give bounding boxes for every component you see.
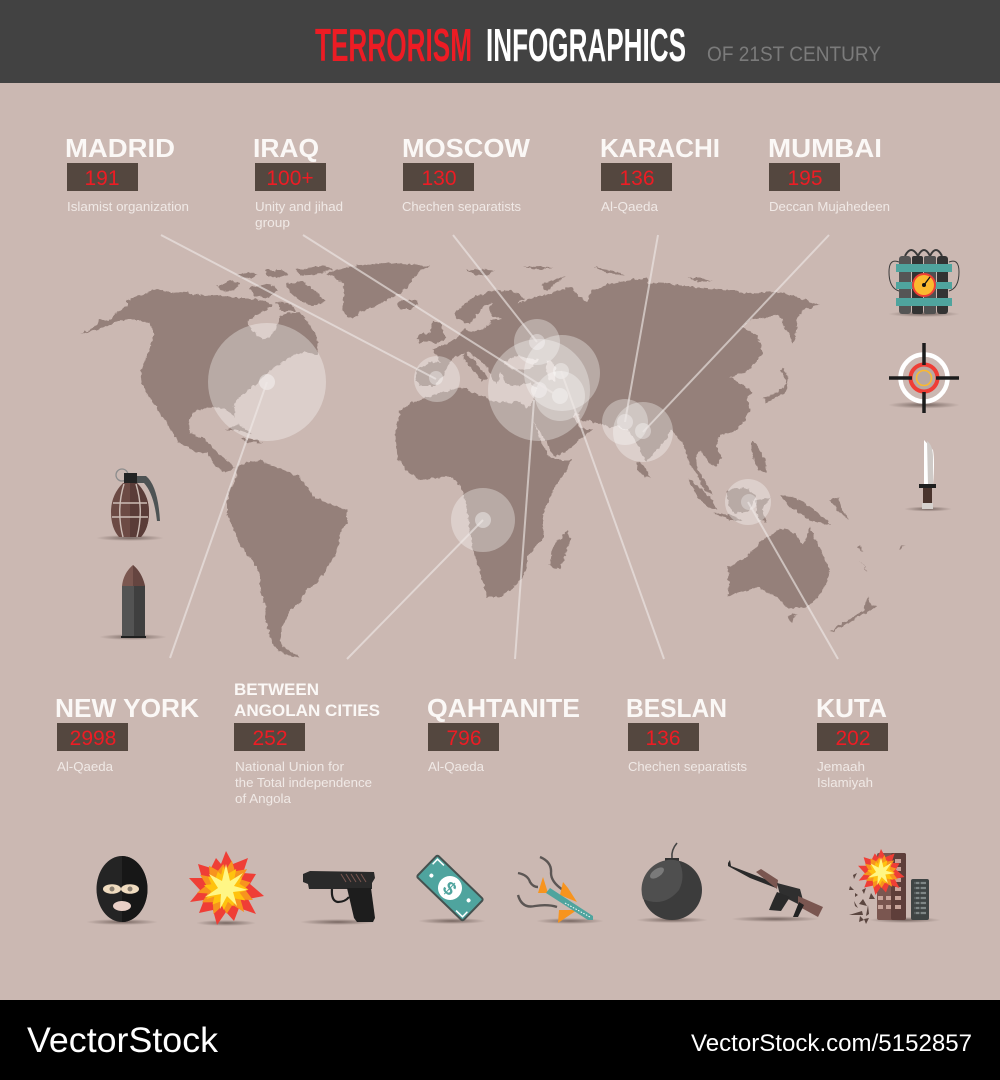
circle: new york [208,323,326,441]
iceland [397,300,419,309]
icon: assault rifle [728,860,823,922]
world map [80,263,905,657]
label: kuta: Jemaah [817,759,865,774]
label: iraq: 100+ [266,167,314,190]
circle: qahtanite [535,371,585,421]
arctic islands [217,265,333,311]
icon: balaclava mask [86,856,158,925]
eurasia [416,277,820,495]
label: qahtanite: 796 [446,727,482,750]
label: new york: Al-Qaeda [57,759,114,774]
header bar with title: TERRORISM [315,19,472,71]
icon: crosshair target [888,343,960,413]
greenland [327,263,430,319]
circle: moscow [514,319,560,365]
icon: pistol [300,871,376,925]
label: between angolan cities: 252 [252,727,288,750]
label: new york: NEW YORK [55,693,199,723]
label: iraq: IRAQ [253,133,319,163]
label: qahtanite: Al-Qaeda [428,759,485,774]
label: karachi: Al-Qaeda [601,199,659,214]
label: madrid: 191 [84,167,120,190]
circle: madrid [414,356,460,402]
icon: knife [904,440,952,512]
circle: kuta [725,479,771,525]
icon: banknote: $ [438,878,460,901]
label: qahtanite [427,693,580,774]
label: iraq: Unity and jihad [255,199,343,214]
label: iraq: group [255,215,290,230]
footer bar with watermark [0,1000,1000,1080]
central america islands [225,424,262,443]
label: mumbai: MUMBAI [768,133,882,163]
label: madrid [65,133,189,214]
label: mumbai: 195 [787,167,823,190]
south america [227,460,347,657]
label: between angolan cities [234,680,380,806]
label: moscow: Chechen separatists [402,199,521,214]
label: qahtanite: QAHTANITE [427,693,580,723]
icon: round bomb [636,843,708,923]
label: between angolan cities: ANGOLAN CITIES [234,701,380,720]
icon: explosion [189,851,264,926]
label: moscow: 130 [421,167,457,190]
label: beslan [626,693,747,774]
circle: iraq [488,339,590,441]
label: karachi [600,133,720,214]
icon: bullet [99,565,167,640]
africa [395,387,572,597]
label: between angolan cities: the Total independence [235,775,372,790]
madagascar [550,530,570,570]
header bar with title: OF 21ST CENTURY [707,43,881,66]
label: beslan: BESLAN [626,693,727,723]
label: beslan: Chechen separatists [628,759,747,774]
north america [80,289,318,472]
new zealand [830,597,877,632]
asia and pacific islands [637,368,905,572]
label: kuta: 202 [835,727,871,750]
footer bar with watermark: VectorStock.com/5152857 [691,1030,972,1057]
label: between angolan cities: of Angola [235,791,292,806]
label: kuta: Islamiyah [817,775,873,790]
label: moscow: MOSCOW [402,133,530,163]
label: iraq [253,133,343,230]
icon: dynamite [888,250,960,317]
label: between angolan cities: BETWEEN [234,680,319,699]
icon: crashing plane [518,857,604,924]
icon: exploding building [849,849,941,924]
circle: beslan [524,335,600,411]
footer bar with watermark: VectorStock [27,1021,219,1060]
label: mumbai [768,133,890,214]
circle: karachi [602,399,648,445]
label: new york: 2998 [70,727,116,750]
label: mumbai: Deccan Mujahedeen [769,199,890,214]
icon: banknote [417,855,486,924]
incident circles [208,319,771,552]
australia [727,527,830,623]
icon: grenade [96,469,164,541]
header bar with title: INFOGRAPHICS [486,19,686,71]
label: karachi: KARACHI [600,133,720,163]
label: madrid: Islamist organization [67,199,189,214]
label: between angolan cities: National Union for [235,759,345,774]
label: beslan: 136 [645,727,681,750]
header bar with title [0,0,1000,83]
europe islands [416,266,713,382]
label: madrid: MADRID [65,133,175,163]
connector lines [161,235,838,659]
circle: angola [451,488,515,552]
label: kuta [816,693,888,790]
label: new york [55,693,199,774]
circle: mumbai [613,402,673,462]
label: moscow [402,133,530,214]
inland seas [503,356,556,382]
label: kuta: KUTA [816,693,887,723]
label: karachi: 136 [619,167,655,190]
